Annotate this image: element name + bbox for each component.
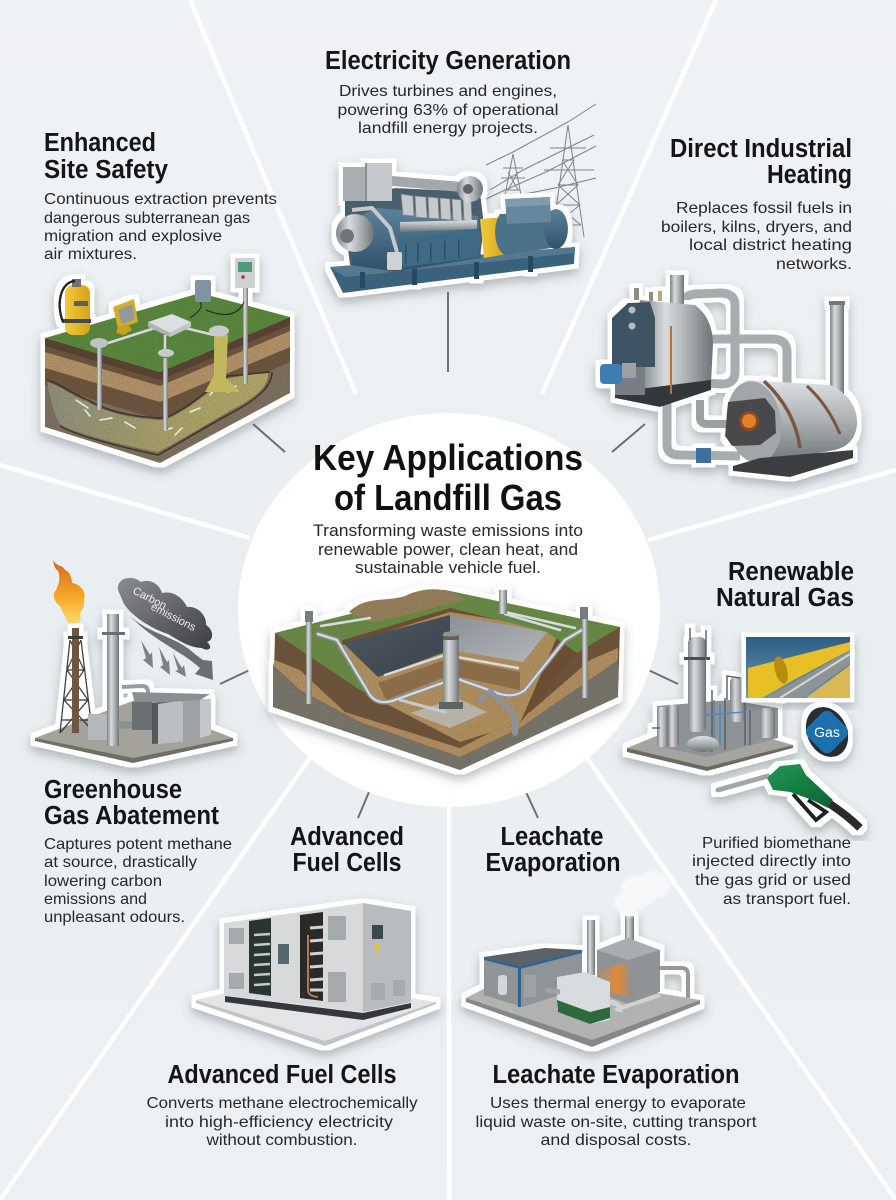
heading xyxy=(670,135,852,189)
heading xyxy=(716,558,854,612)
description: Continuous extraction prevents xyxy=(44,191,277,208)
description: migration and explosive xyxy=(44,228,222,245)
processing units xyxy=(88,714,107,740)
panel: electricity generation xyxy=(325,47,596,293)
icon: green fuel nozzle xyxy=(718,764,860,828)
wall display xyxy=(235,258,255,288)
icon: carbon emissions cloud: Carbon xyxy=(131,585,168,612)
upper heading xyxy=(486,823,620,877)
icon: transmission towers xyxy=(484,104,596,237)
description xyxy=(44,191,277,263)
icon: carbon emissions cloud: emissions xyxy=(149,601,198,634)
upper heading: Leachate xyxy=(500,823,604,851)
description: Captures potent methane xyxy=(44,836,232,853)
evaporator tower xyxy=(597,938,660,1004)
lower heading: Advanced Fuel Cells xyxy=(168,1061,396,1089)
side face xyxy=(363,903,411,1012)
description: without combustion. xyxy=(205,1132,358,1149)
heading: Site Safety xyxy=(44,156,169,184)
junction box xyxy=(148,314,191,333)
description: Uses thermal energy to evaporate xyxy=(490,1095,746,1112)
yellow gas stream xyxy=(205,335,240,392)
vents xyxy=(229,916,405,1002)
cylinder heads xyxy=(401,194,472,221)
heading: Renewable xyxy=(728,558,854,586)
gas monitor xyxy=(113,299,138,329)
pipe rack backing xyxy=(657,700,778,757)
engine backing xyxy=(345,188,484,272)
description xyxy=(44,836,232,926)
title: of Landfill Gas xyxy=(334,477,562,518)
panel: central title xyxy=(273,437,620,770)
upper heading xyxy=(290,823,404,877)
arrow: main emission sweep xyxy=(130,616,213,680)
right tank xyxy=(745,380,857,464)
description: Replaces fossil fuels in xyxy=(676,200,852,217)
heading: Enhanced xyxy=(44,129,156,157)
platform xyxy=(35,700,233,763)
connector: greenhouse abatement xyxy=(220,668,254,684)
control unit xyxy=(557,972,610,1024)
control screen xyxy=(278,944,289,964)
connector: electricity generation xyxy=(447,292,449,372)
subtitle: Transforming waste emissions into xyxy=(313,522,583,540)
tank xyxy=(498,975,507,995)
gas streaks xyxy=(76,385,236,435)
air boxes xyxy=(343,167,365,201)
stack xyxy=(107,614,119,746)
subtitle: sustainable vehicle fuel. xyxy=(355,559,541,577)
soil layers xyxy=(45,317,290,463)
extinguisher xyxy=(65,285,90,335)
illustration: evaporation plant xyxy=(466,916,700,1047)
description: Purified biomethane xyxy=(702,835,851,852)
right stack xyxy=(300,912,323,1001)
heading xyxy=(44,776,219,830)
description: injected directly into xyxy=(692,853,851,870)
gauges xyxy=(634,288,639,300)
boiler base xyxy=(615,380,711,407)
illustration: landfill cross-section xyxy=(273,589,620,770)
front face xyxy=(224,903,363,1012)
upper heading: Advanced xyxy=(290,823,404,851)
furnace door xyxy=(725,398,776,446)
panel: greenhouse gas abatement xyxy=(35,560,233,926)
building xyxy=(484,948,582,1007)
heading: Gas Abatement xyxy=(44,802,219,830)
description xyxy=(146,1095,418,1149)
connector: industrial heating xyxy=(612,424,645,452)
description: Drives turbines and engines, xyxy=(339,83,557,100)
generator xyxy=(495,212,558,255)
description: powering 63% of operational xyxy=(338,102,558,119)
left stack xyxy=(249,918,271,996)
heading: Electricity Generation xyxy=(325,47,571,75)
description: boilers, kilns, dryers, and xyxy=(661,219,852,236)
grass xyxy=(45,293,290,372)
platform xyxy=(466,970,700,1043)
description: dangerous subterranean gas xyxy=(44,210,250,227)
lower heading: Leachate Evaporation xyxy=(492,1061,740,1089)
pipes xyxy=(667,293,787,456)
blue burner xyxy=(600,364,622,384)
description: networks. xyxy=(776,256,852,273)
heading: Natural Gas xyxy=(716,584,854,612)
engine block xyxy=(350,208,481,271)
title xyxy=(313,437,583,518)
heading xyxy=(44,129,169,184)
description: unpleasant odours. xyxy=(44,909,185,926)
icon: carbon emissions cloud xyxy=(118,578,213,680)
connector: site safety xyxy=(253,424,285,452)
description xyxy=(661,200,852,273)
burner housing xyxy=(615,367,645,395)
boiler dark face xyxy=(612,302,655,367)
monitoring wells xyxy=(97,340,102,410)
heading: Greenhouse xyxy=(44,776,182,804)
pipes xyxy=(660,968,688,998)
central white circle xyxy=(238,413,660,807)
tank skid xyxy=(733,450,853,477)
gas pocket xyxy=(47,372,268,452)
yellow coupling xyxy=(480,217,507,258)
smoke plume xyxy=(614,871,671,916)
icon: flare flame xyxy=(53,560,85,626)
illustration: yellow gas pipeline xyxy=(746,637,850,698)
flywheel xyxy=(336,214,374,252)
heading: Direct Industrial xyxy=(670,135,852,163)
boiler body xyxy=(640,300,713,392)
description: into high-efficiency electricity xyxy=(165,1114,393,1131)
illustration: biomethane refinery xyxy=(627,628,793,771)
description: emissions and xyxy=(44,891,147,908)
panel: direct industrial heating xyxy=(600,135,857,477)
upper heading: Evaporation xyxy=(486,849,620,877)
connector: leachate evaporation xyxy=(526,792,538,818)
skid base xyxy=(330,247,575,293)
illustration: boilers and pipework xyxy=(600,275,857,477)
arrows: small emissions xyxy=(141,640,186,677)
description: lowering carbon xyxy=(44,873,162,890)
panel: leachate evaporation xyxy=(466,823,757,1149)
illustration: gas monitoring soil block xyxy=(45,258,290,463)
panel: advanced fuel cells xyxy=(146,823,436,1149)
side screen xyxy=(372,925,383,939)
illustration: gas engine generator xyxy=(330,163,575,293)
description: landfill energy projects. xyxy=(358,120,538,137)
left boiler chimney xyxy=(670,275,684,305)
connector: renewable natural gas xyxy=(642,667,678,684)
description: Converts methane electrochemically xyxy=(146,1095,418,1112)
valve xyxy=(696,448,711,463)
description: liquid waste on-site, cutting transport xyxy=(476,1114,757,1131)
title: Key Applications xyxy=(313,437,583,478)
sensor xyxy=(195,280,211,302)
stack xyxy=(625,916,634,944)
description: at source, drastically xyxy=(44,854,197,871)
icon: gas badge xyxy=(798,700,856,764)
panel: renewable natural gas xyxy=(627,558,860,908)
description: local district heating xyxy=(689,237,852,254)
right chimney xyxy=(830,303,844,408)
connector: fuel cells xyxy=(358,792,369,818)
copper line xyxy=(670,326,672,394)
upper heading: Fuel Cells xyxy=(292,849,402,877)
description: and disposal costs. xyxy=(540,1132,692,1149)
description: as transport fuel. xyxy=(723,891,851,908)
illustration: flare stack and treatment plant xyxy=(35,614,233,763)
icon: gas badge: Gas xyxy=(814,724,840,740)
description xyxy=(338,83,558,137)
illustration: fuel cell cabinet xyxy=(196,903,436,1046)
subtitle: renewable power, clean heat, and xyxy=(318,541,578,559)
subtitle xyxy=(313,522,583,577)
panel: enhanced site safety xyxy=(44,129,290,463)
heading: Heating xyxy=(767,161,852,189)
top manifold xyxy=(392,181,462,187)
description xyxy=(692,835,851,908)
furnace glow xyxy=(598,962,632,996)
pipe run xyxy=(122,686,148,700)
platform xyxy=(196,992,436,1044)
connecting cables xyxy=(108,328,214,350)
description xyxy=(476,1095,757,1149)
description: the gas grid or used xyxy=(695,872,851,889)
well caps xyxy=(90,338,108,348)
flare tower xyxy=(60,640,92,733)
description: air mixtures. xyxy=(44,246,137,263)
